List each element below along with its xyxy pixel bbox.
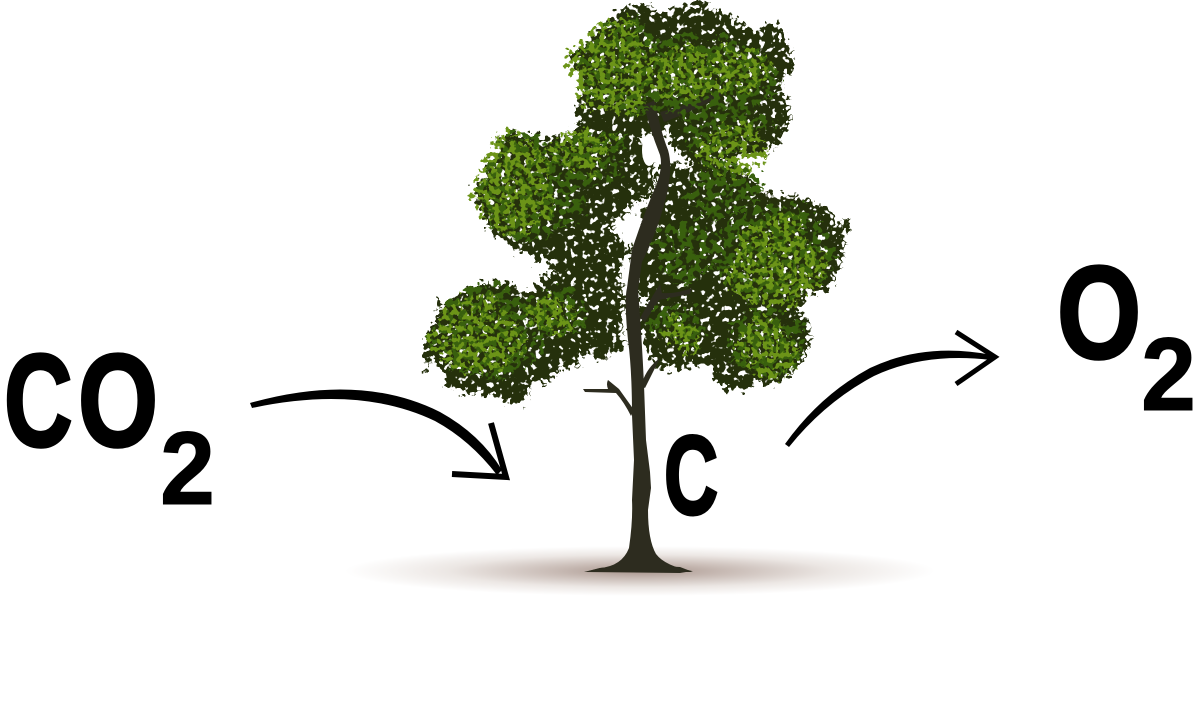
- foliage: mid green layer: [432, 24, 833, 382]
- label: CO2: O: [78, 328, 158, 475]
- label: CO2: 2: [160, 411, 215, 527]
- trunk: [585, 100, 692, 573]
- tree: [426, 6, 844, 573]
- ground line at tree base: [584, 566, 693, 572]
- label: C: C: [664, 414, 718, 539]
- label: O2: [1057, 239, 1196, 433]
- foliage: dark inner layer: [426, 6, 844, 398]
- foliage: light green highlights: [432, 18, 830, 382]
- arrow: O2 out of tree: [785, 332, 995, 447]
- ground shadow: [345, 546, 935, 596]
- label: CO2: [4, 328, 215, 527]
- branch: lower left: [583, 380, 634, 416]
- label: O2: 2: [1141, 317, 1196, 433]
- label: O2: O: [1057, 239, 1141, 386]
- branch: lower right: [641, 358, 660, 388]
- trunk and branches: [583, 90, 722, 573]
- branch: upper right: [640, 284, 692, 322]
- branch: upper canopy: [660, 90, 722, 122]
- arrow: CO2 into tree: [250, 389, 506, 477]
- label: CO2: C: [4, 328, 73, 475]
- clearings in the canopy: [622, 134, 656, 244]
